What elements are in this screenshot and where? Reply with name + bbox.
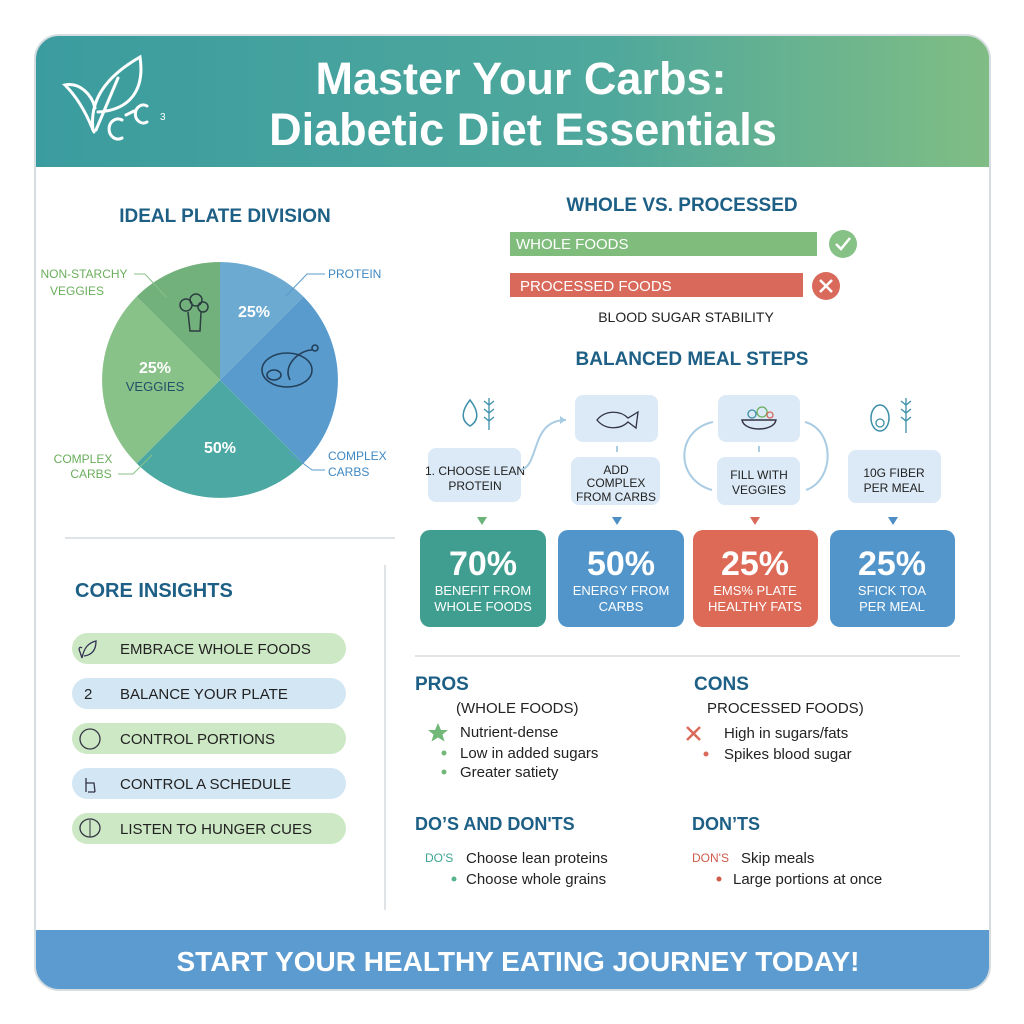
title: Master Your Carbs: (316, 53, 726, 104)
pie chart: 50% (204, 440, 236, 457)
heading: whole vs processed: WHOLE VS. PROCESSED (566, 195, 798, 216)
steps flow: PER MEAL (864, 481, 925, 495)
stat cards: 25% (858, 545, 926, 583)
footer band (35, 930, 990, 990)
pros: Nutrient-dense (460, 724, 558, 741)
bar caption: BLOOD SUGAR STABILITY (598, 309, 774, 325)
pie labels: PROTEIN (328, 267, 381, 281)
insights list: BALANCE YOUR PLATE (120, 686, 288, 703)
cons: CONS (694, 674, 749, 695)
pie chart: 25% (139, 360, 171, 377)
stat cards: PER MEAL (859, 599, 925, 614)
do's (415, 814, 608, 888)
steps flow: FROM CARBS (576, 490, 656, 504)
pie chart (102, 262, 338, 498)
stat cards: BENEFIT FROM (435, 583, 531, 598)
pie labels: CARBS (70, 467, 112, 481)
insights list: 2 (84, 686, 92, 703)
bar: processed foods: PROCESSED FOODS (520, 278, 672, 295)
pros: Low in added sugars (460, 745, 598, 762)
stat cards: EMS% PLATE (713, 583, 797, 598)
header band (35, 35, 990, 167)
stat cards: 50% (587, 545, 655, 583)
icon: leaf carbon logo (65, 57, 166, 139)
bar: whole foods: WHOLE FOODS (516, 236, 629, 253)
do's: DO'S (425, 851, 453, 865)
stat cards: ENERGY FROM (573, 583, 669, 598)
footer text: START YOUR HEALTHY EATING JOURNEY TODAY! (177, 946, 859, 977)
don'ts: DON’TS (692, 814, 760, 834)
do's: Choose lean proteins (466, 850, 608, 867)
heading: balanced meal steps: BALANCED MEAL STEPS (576, 349, 808, 370)
insights list: CONTROL PORTIONS (120, 731, 275, 748)
don'ts: DON'S (692, 851, 729, 865)
stat cards: SFICK TOA (858, 583, 926, 598)
steps flow (425, 395, 941, 525)
steps flow: 10G FIBER (863, 466, 925, 480)
steps flow: 1. CHOOSE LEAN (425, 464, 525, 478)
pie labels: NON-STARCHY (40, 267, 128, 281)
insights list: EMBRACE WHOLE FOODS (120, 641, 311, 658)
pros (415, 674, 598, 781)
icon: chicken (262, 345, 318, 387)
pie labels: COMPLEX (54, 452, 112, 466)
stat cards: HEALTHY FATS (708, 599, 802, 614)
heading: core insights: CORE INSIGHTS (75, 580, 233, 602)
do's: DO’S AND DON'TS (415, 814, 575, 834)
cons: PROCESSED FOODS) (707, 700, 864, 717)
pros: (WHOLE FOODS) (456, 700, 579, 717)
heading: ideal plate division: IDEAL PLATE DIVISION (119, 206, 331, 227)
pie labels: VEGGIES (50, 284, 104, 298)
cons: High in sugars/fats (724, 725, 848, 742)
title (269, 53, 777, 155)
pie chart: VEGGIES (126, 379, 185, 394)
insights list: CONTROL A SCHEDULE (120, 776, 291, 793)
do's: Choose whole grains (466, 871, 606, 888)
pros: PROS (415, 674, 469, 695)
title: Diabetic Diet Essentials (269, 104, 777, 155)
pie labels: CARBS (328, 465, 369, 479)
bar: processed foods (510, 272, 840, 300)
don'ts: Large portions at once (733, 871, 882, 888)
stat cards (420, 530, 955, 627)
steps flow: COMPLEX (587, 476, 645, 490)
cons (687, 674, 864, 763)
steps flow: PROTEIN (448, 479, 502, 493)
steps flow: VEGGIES (732, 483, 786, 497)
icon: broccoli (180, 294, 208, 331)
pros: Greater satiety (460, 764, 559, 781)
don'ts (692, 814, 882, 888)
pie labels: COMPLEX (328, 449, 387, 463)
stat cards: 70% (449, 545, 517, 583)
cons: Spikes blood sugar (724, 746, 852, 763)
insights list: LISTEN TO HUNGER CUES (120, 821, 312, 838)
pie chart: 25% (238, 304, 270, 321)
stat cards: 25% (721, 545, 789, 583)
pie labels (40, 267, 387, 481)
steps flow: ADD (603, 463, 629, 477)
icon: leaf carbon logo: 3 (160, 112, 166, 123)
stat cards: CARBS (599, 599, 644, 614)
don'ts: Skip meals (741, 850, 814, 867)
steps flow: FILL WITH (730, 468, 788, 482)
insights list (72, 633, 346, 844)
stat cards: WHOLE FOODS (434, 599, 532, 614)
bar: whole foods (510, 230, 857, 258)
